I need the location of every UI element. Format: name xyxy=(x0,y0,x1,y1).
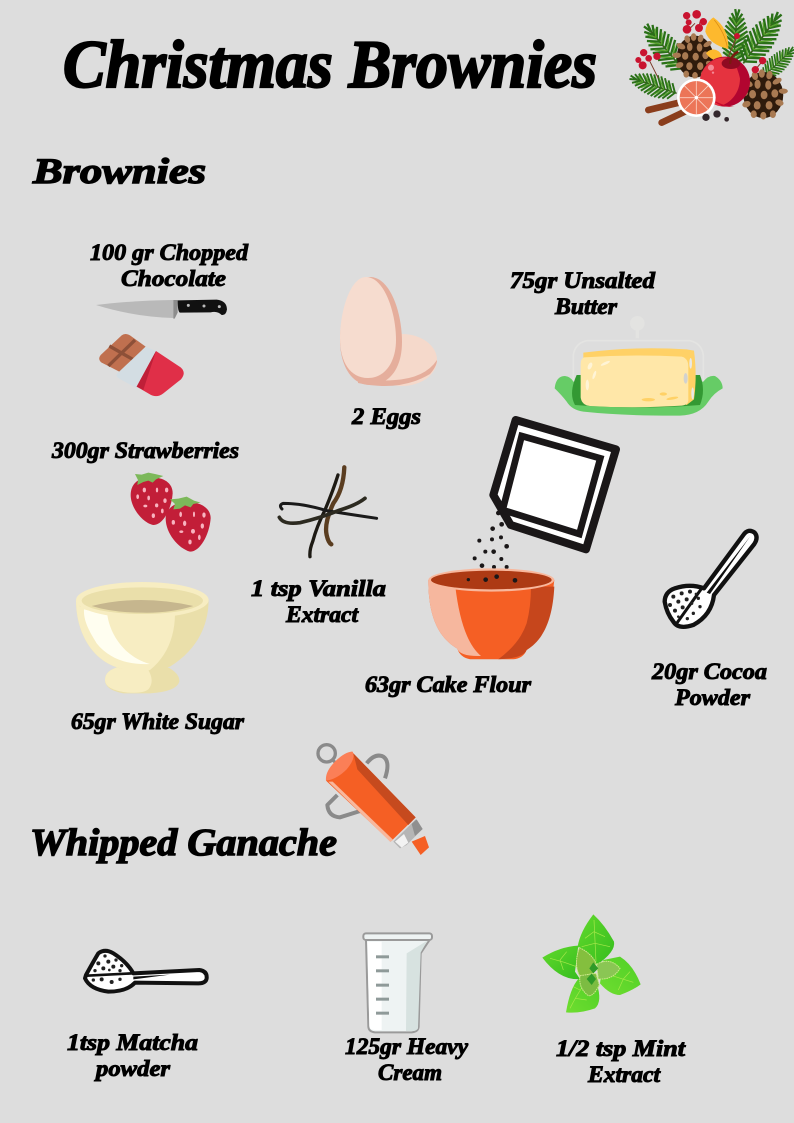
label: mint extract: 1/2 tsp Mint xyxy=(556,1036,686,1061)
label: mint extract: Extract xyxy=(587,1062,661,1087)
ingredient: white sugar xyxy=(71,582,245,734)
label: chocolate: 100 gr Chopped xyxy=(90,240,249,265)
icon: cream bowl xyxy=(76,582,209,693)
label: butter xyxy=(510,268,656,319)
label: matcha powder xyxy=(67,1030,198,1081)
label: cake flour: 63gr Cake Flour xyxy=(365,672,532,697)
icon: flour bag pouring into bowl xyxy=(428,420,616,659)
heading: Whipped Ganache: Whipped Ganache xyxy=(30,822,337,864)
ingredient: strawberries xyxy=(51,438,239,552)
label: heavy cream: 125gr Heavy xyxy=(345,1034,469,1059)
icon: knife and chocolate bar xyxy=(96,300,227,396)
icon: christmas decoration xyxy=(626,5,794,123)
title: Christmas Brownies xyxy=(63,26,597,102)
heading: Brownies: Brownies xyxy=(32,151,206,191)
icon: spoon with cocoa xyxy=(665,531,757,627)
label: chocolate: Chocolate xyxy=(121,266,226,291)
label: heavy cream: Cream xyxy=(378,1060,442,1085)
label: cocoa powder: Powder xyxy=(674,685,751,710)
label: butter: Butter xyxy=(554,294,618,319)
icon: mint leaves xyxy=(542,914,641,1013)
ingredient: heavy cream xyxy=(345,933,469,1085)
ingredient: matcha powder xyxy=(67,951,207,1081)
label: matcha powder: 1tsp Matcha xyxy=(67,1030,198,1055)
icon: piping tool xyxy=(318,745,429,855)
ingredient: vanilla extract xyxy=(251,467,386,627)
label: vanilla: 1 tsp Vanilla xyxy=(251,576,386,601)
icon: eggs xyxy=(340,277,437,386)
label: cocoa powder: 20gr Cocoa xyxy=(651,659,767,684)
label: heavy cream xyxy=(345,1034,469,1085)
label: butter: 75gr Unsalted xyxy=(510,268,656,293)
ingredient: cake flour xyxy=(365,420,616,697)
icon: spoon with matcha xyxy=(85,951,207,992)
label: vanilla xyxy=(251,576,386,627)
ingredient: chopped chocolate xyxy=(90,240,249,396)
label: chocolate xyxy=(90,240,249,291)
icon: measuring cup xyxy=(363,933,432,1032)
label: mint extract xyxy=(556,1036,686,1087)
ingredient: cocoa powder xyxy=(651,531,767,710)
ingredient: mint extract xyxy=(542,914,686,1087)
icon: butter dish xyxy=(555,316,723,416)
label: cocoa powder xyxy=(651,659,767,710)
ingredient: butter xyxy=(510,268,723,416)
label: matcha powder: powder xyxy=(94,1056,171,1081)
icon: strawberries xyxy=(131,473,211,552)
label: white sugar: 65gr White Sugar xyxy=(71,709,245,734)
label: strawberries: 300gr Strawberries xyxy=(51,438,239,463)
icon: vanilla pods xyxy=(279,467,377,557)
label: eggs: 2 Eggs xyxy=(351,404,421,429)
label: vanilla: Extract xyxy=(285,602,359,627)
ingredient: eggs xyxy=(340,277,437,429)
